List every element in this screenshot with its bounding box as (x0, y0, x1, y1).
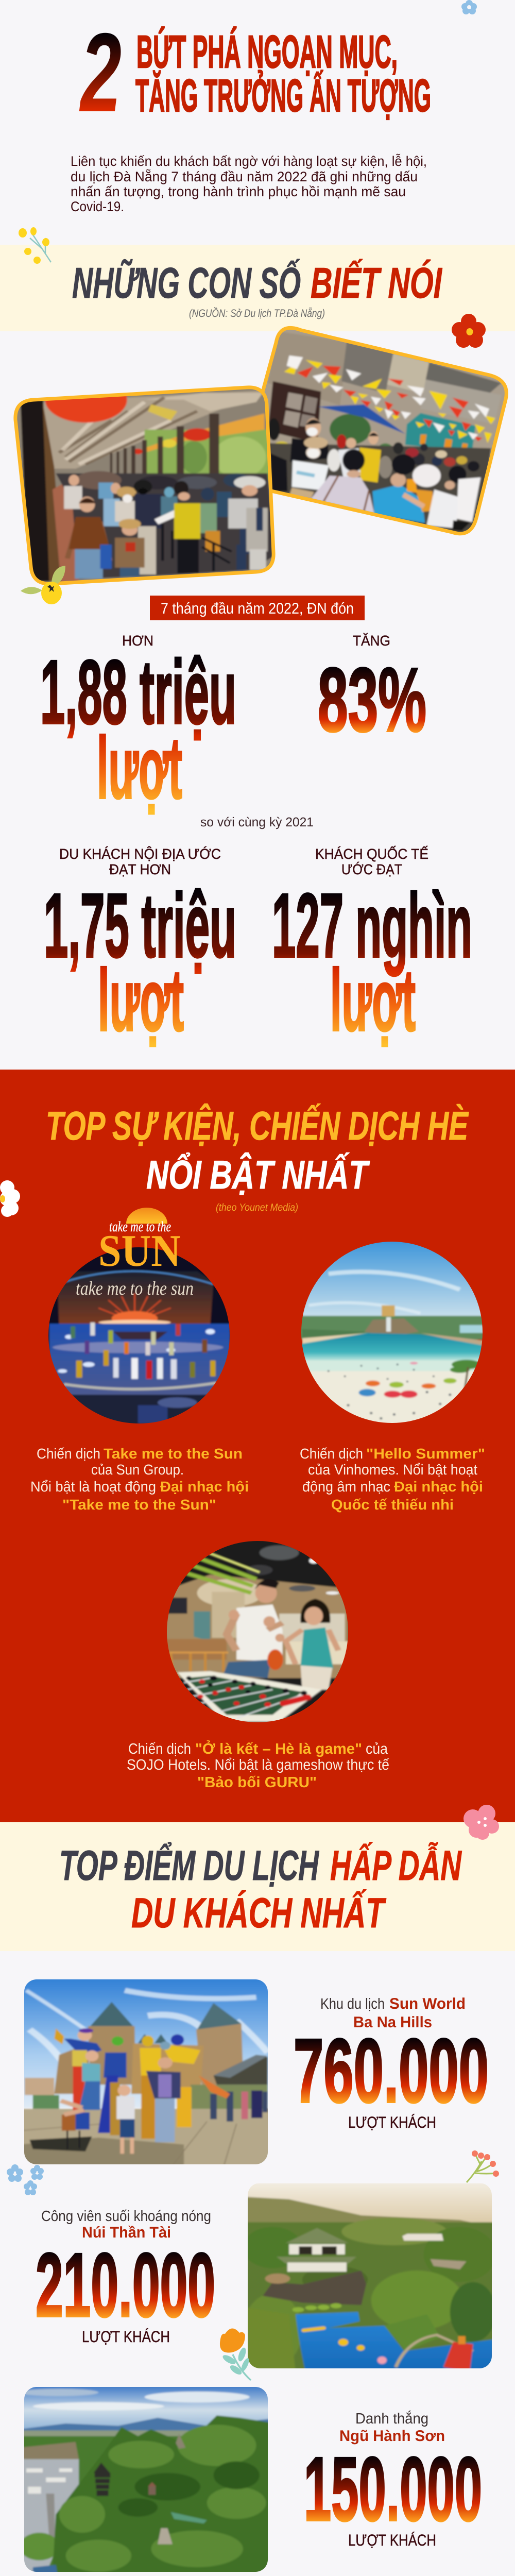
photo: street crowd with flags (262, 326, 508, 536)
caption: sojo hotels: "Bảo bối GURU" (197, 1774, 317, 1791)
photo: ngũ hành sơn (20, 2383, 272, 2574)
stat: du khách nội địa: DU KHÁCH NỘI ĐỊA ƯỚC (59, 846, 221, 862)
caption: sojo hotels: của (366, 1741, 388, 1757)
destination 1 stats: sun world: LƯỢT KHÁCH (348, 2113, 436, 2131)
caption: hello summer (300, 1446, 485, 1513)
intro paragraph: Covid-19. (71, 199, 124, 214)
destination 2 stats: núi thần tài: Công viên suối khoáng nóng (41, 2208, 211, 2225)
panel: top destinations heading band (0, 1822, 515, 1951)
caption: take me to the sun (30, 1446, 249, 1513)
caption: sojo hotels (127, 1740, 389, 1791)
destination 2 stats: núi thần tài (36, 2208, 215, 2346)
icon: orange tulip (220, 2328, 251, 2380)
stat: du khách nội địa: lượt (98, 952, 184, 1049)
caption: sojo hotels: "Ở là kết – Hè là game" (195, 1740, 362, 1757)
caption: take me to the sun: Chiến dịch (37, 1446, 100, 1462)
caption: sojo hotels: SOJO Hotels. Nổi bật là gameshow thực tế (127, 1757, 389, 1773)
stat: hơn 1,88 triệu lượt (40, 633, 236, 817)
photo: queue of visitors under covered walkway (13, 377, 276, 584)
caption: take me to the sun: "Take me to the Sun" (62, 1497, 216, 1513)
destination 1 stats: sun world (294, 1995, 489, 2131)
stat: khách quốc tế (272, 845, 472, 1049)
destination 2 stats: núi thần tài: Núi Thần Tài (82, 2224, 171, 2241)
source note: (NGUỒN: Sở Du lịch TP.Đà Nẵng) (189, 307, 325, 319)
caption: hello summer: của Vinhomes. Nổi bật hoạt (308, 1462, 477, 1478)
caption: hello summer: Chiến dịch (300, 1446, 363, 1462)
logo: take me to the sun: SUN (98, 1226, 181, 1276)
destination 1 stats: sun world: Khu du lịch (320, 1996, 385, 2012)
caption: hello summer: "Hello Summer" (366, 1446, 485, 1462)
icon: three blue flowers (7, 2164, 44, 2195)
icon: red berry branch (467, 2150, 499, 2182)
panel: numbers heading band (0, 245, 515, 331)
logo: take me to the sun: take me to the (109, 1219, 171, 1235)
heading: top điểm du lịch: DU KHÁCH NHẤT (131, 1889, 386, 1937)
heading: top sự kiện (46, 1103, 469, 1197)
stat: khách quốc tế: KHÁCH QUỐC TẾ (315, 845, 428, 862)
heading: top điểm du lịch (59, 1842, 462, 1937)
caption: take me to the sun: Take me to the Sun (104, 1446, 243, 1462)
heading: top sự kiện: NỔI BẬT NHẤT (146, 1152, 370, 1197)
intro paragraph: du lịch Đà Nẵng 7 tháng đầu năm 2022 đã ghi những dấu (71, 169, 418, 184)
caption: hello summer: Quốc tế thiếu nhi (331, 1497, 454, 1513)
destination 3 stats: ngũ hành sơn: Ngũ Hành Sơn (339, 2428, 445, 2445)
stat: khách quốc tế: lượt (330, 952, 416, 1049)
stat: du khách nội địa: ĐẠT HƠN (109, 861, 171, 877)
intro paragraph: nhấn ấn tượng, trong hành trình phục hồi mạnh mẽ sau (71, 184, 406, 199)
text: 1,75 triệu (44, 875, 236, 976)
icon: yellow fruit with leaves (21, 566, 65, 604)
stat: khách quốc tế: ƯỚC ĐẠT (341, 861, 402, 877)
stat: tăng 83%: TĂNG (353, 633, 390, 649)
caption: hello summer: động âm nhạc (302, 1479, 390, 1495)
photo: sojo foosball couple (167, 1541, 348, 1722)
note: so với cùng kỳ: so với cùng kỳ 2021 (200, 815, 314, 829)
title (135, 26, 431, 121)
caption: take me to the sun: Đại nhạc hội (160, 1479, 249, 1495)
caption: hello summer: Đại nhạc hội (394, 1479, 483, 1495)
section number 2: 2 (79, 10, 122, 135)
caption: take me to the sun: Nổi bật là hoạt động (30, 1479, 156, 1495)
stat: du khách nội địa (44, 846, 236, 1049)
panel: top events red section (0, 1070, 515, 1822)
destination 3 stats: ngũ hành sơn: Danh thắng (355, 2410, 428, 2427)
stat: tăng 83%: 83% (318, 650, 426, 751)
stat: hơn 1,88 triệu lượt: HƠN (122, 633, 153, 649)
icon: blue flower top (461, 0, 477, 14)
photo: sun world ba na hills (20, 1977, 272, 2167)
logo: take me to the sun (98, 1208, 181, 1276)
image caption text on stage: take me to the sun (76, 1278, 194, 1299)
icon: white flower (0, 1180, 20, 1217)
caption: sojo hotels: Chiến dịch (128, 1741, 191, 1757)
icon: yellow branch (19, 227, 51, 264)
heading: những con số biết nói: NHỮNG CON SỐ (72, 259, 301, 307)
destination 1 stats: sun world: Sun World (389, 1995, 466, 2012)
destination 2 stats: núi thần tài: 210.000 (36, 2235, 215, 2336)
heading: những con số biết nói: BIẾT NÓI (311, 259, 442, 307)
label bar: 7 tháng đầu năm (150, 596, 365, 620)
destination 3 stats: ngũ hành sơn (304, 2410, 482, 2549)
intro paragraph: Liên tục khiến du khách bất ngờ với hàng loạt sự kiện, lễ hội, (71, 154, 427, 169)
intro paragraph (71, 154, 427, 214)
stat: tăng 83% (318, 633, 426, 751)
stat: hơn 1,88 triệu lượt: lượt (97, 719, 182, 817)
photo: hello summer lagoon (301, 1242, 483, 1423)
caption: take me to the sun: của Sun Group. (91, 1462, 184, 1478)
photo: núi thần tài (243, 2183, 496, 2372)
destination 1 stats: sun world: Ba Na Hills (353, 2014, 432, 2031)
icon: pink flower (464, 1805, 499, 1840)
destination 2 stats: núi thần tài: LƯỢT KHÁCH (82, 2328, 170, 2346)
heading: top điểm du lịch: TOP ĐIỂM DU LỊCH (59, 1842, 319, 1889)
text: 1,88 triệu (40, 642, 236, 743)
destination 3 stats: ngũ hành sơn: LƯỢT KHÁCH (348, 2531, 436, 2549)
source note: theo Younet Media: (theo Younet Media) (216, 1202, 298, 1213)
label bar: 7 tháng đầu năm: 7 tháng đầu năm 2022, ĐN đón (161, 600, 354, 617)
icon: red flower (452, 314, 486, 348)
photo: take me to the sun stage (46, 1245, 236, 1426)
